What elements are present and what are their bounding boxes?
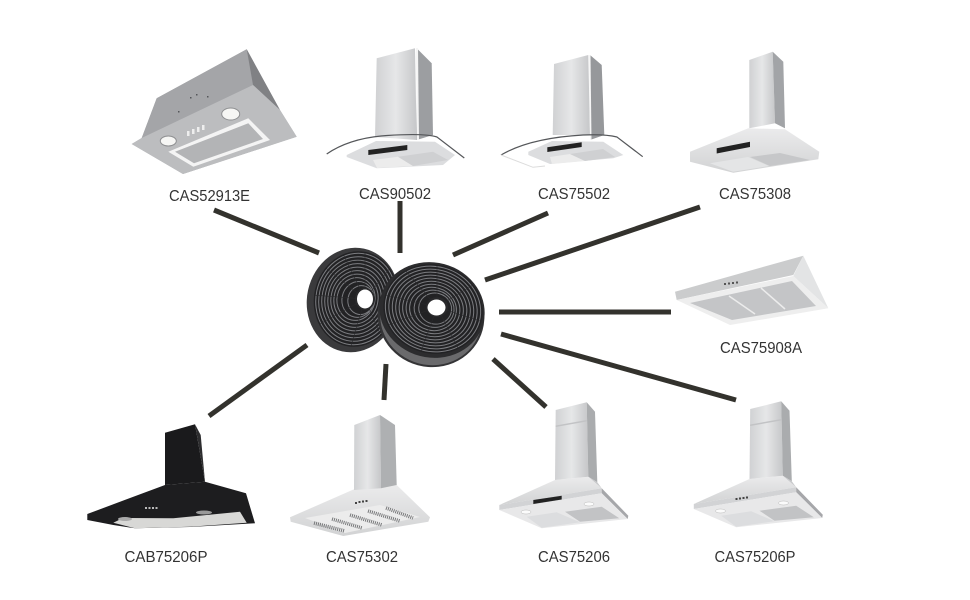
- label: CAS75908A: CAS75908A: [720, 340, 802, 357]
- infographic: charcoal filter compatibility diagram: [87, 48, 828, 562]
- label: CAS75302: CAS75302: [326, 549, 398, 566]
- label: CAS75308: CAS75308: [719, 186, 791, 203]
- label: CAS52913E: CAS52913E: [169, 188, 250, 205]
- hood: CAS75908A: [675, 256, 828, 325]
- connector lines: [209, 201, 736, 416]
- label: CAS75206: CAS75206: [538, 549, 610, 566]
- hood: CAB75206P: [87, 424, 255, 528]
- label: CAS75502: CAS75502: [538, 186, 610, 203]
- hood: CAS75206: [499, 402, 628, 528]
- hood: CAS90502: [327, 48, 464, 168]
- label: CAS90502: CAS90502: [359, 186, 431, 203]
- hood: CAS75308: [690, 52, 819, 173]
- left filter disc: [306, 248, 394, 352]
- charcoal filters: [306, 248, 485, 368]
- hood: CAS52913E: [132, 49, 297, 174]
- label: CAB75206P: CAB75206P: [124, 549, 208, 566]
- label: CAS75206P: CAS75206P: [714, 549, 796, 566]
- right filter disc: [378, 262, 485, 368]
- hood: CAS75502: [501, 55, 643, 167]
- hood: CAS75206P: [694, 401, 823, 527]
- hood: CAS75302: [290, 415, 430, 536]
